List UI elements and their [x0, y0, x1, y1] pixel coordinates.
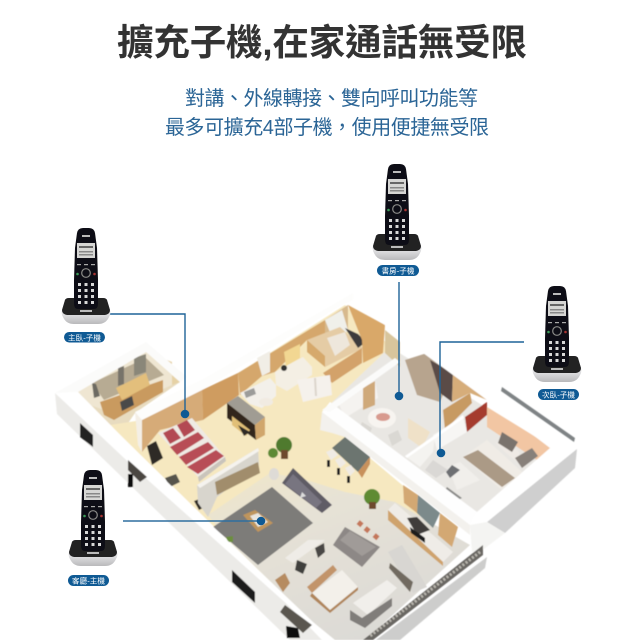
- floors: [78, 305, 550, 640]
- dining bar: [326, 437, 370, 483]
- phone: living room main unit: [68, 470, 117, 586]
- master bed: [147, 418, 226, 510]
- study room: [78, 352, 180, 420]
- phone: master bedroom handset: 主臥-子機: [68, 332, 101, 342]
- phone: second bedroom handset: [533, 286, 581, 400]
- connector: study: [395, 282, 403, 400]
- TV wall: [197, 448, 260, 517]
- phone: master bedroom handset: [62, 228, 110, 342]
- subtitle line 2: 最多可擴充4部子機，使用便捷無受限: [165, 116, 489, 139]
- rims of walls: [55, 293, 577, 640]
- vanity and pantry: [227, 378, 276, 440]
- second bedroom: [405, 393, 552, 500]
- kitchen: [388, 485, 458, 593]
- title: 擴充子機,在家通話無受限: [117, 22, 527, 63]
- phone: study handset: [373, 164, 421, 276]
- connector: living room: [123, 517, 265, 525]
- phone: living room main unit: 客廳-主機: [72, 576, 105, 586]
- outer wall faces: [55, 393, 577, 640]
- connector: master bedroom: [108, 314, 189, 418]
- living zone: [226, 468, 332, 542]
- phone: second bedroom handset: 次臥-子機: [542, 390, 575, 400]
- windows and balcony notches: [80, 423, 312, 638]
- bathroom wing: [275, 305, 385, 402]
- dining room and fridge: [337, 330, 487, 448]
- back wood walls: [142, 305, 348, 452]
- plants: [268, 437, 380, 509]
- lounge furniture: [275, 520, 397, 628]
- connector: second bedroom: [437, 342, 524, 457]
- floor plan illustration: [55, 293, 577, 640]
- phone: study handset: 書房-子機: [382, 266, 415, 276]
- subtitle line 1: 對講、外線轉接、雙向呼叫功能等: [185, 87, 478, 110]
- balcony railings: [363, 387, 575, 640]
